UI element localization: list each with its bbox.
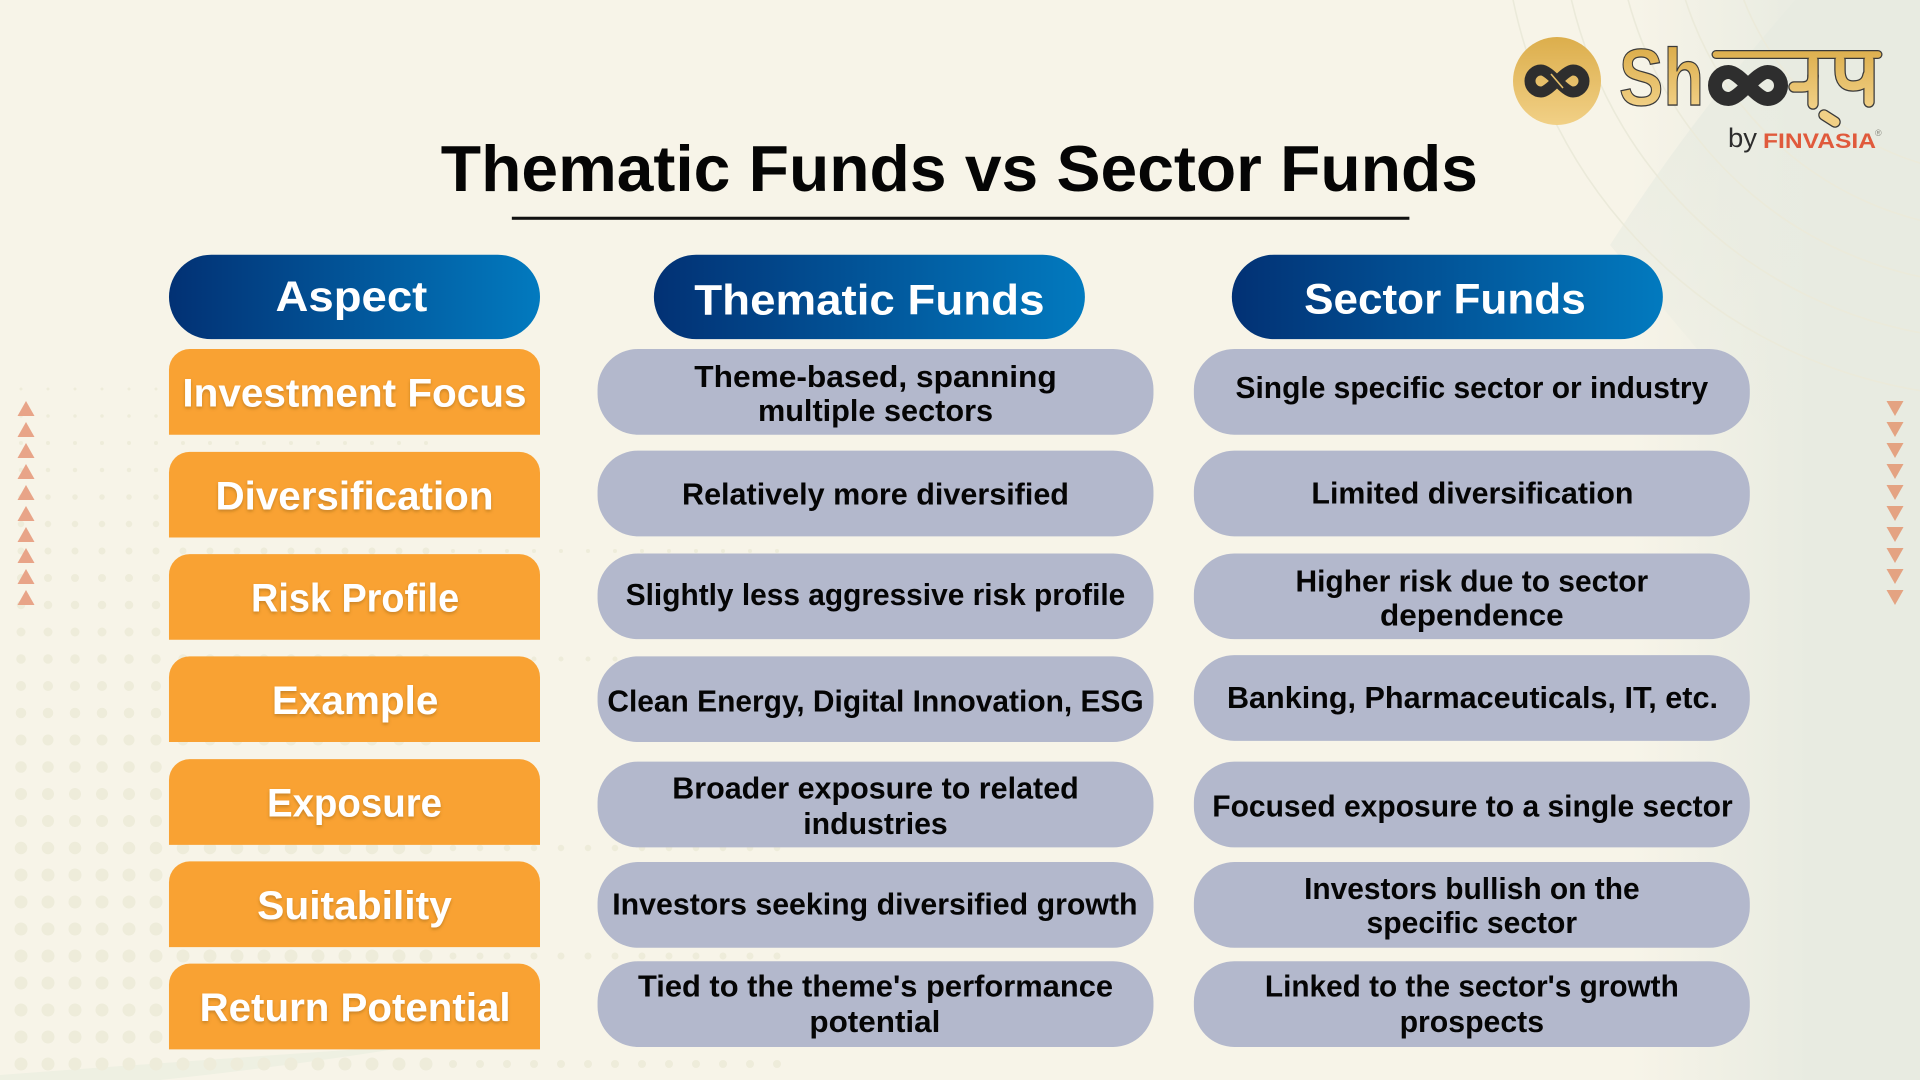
title underline — [512, 217, 1409, 220]
sector cell: exposure — [1194, 762, 1750, 847]
sector cell: suitability — [1194, 862, 1750, 948]
sector cell: return potential: Linked to the sector's growth — [1265, 970, 1679, 1004]
logo byline: FINVASIA — [1763, 129, 1876, 153]
row label: Exposure: Exposure — [267, 782, 442, 826]
header: Thematic Funds — [654, 255, 1085, 339]
thematic cell: diversification — [598, 451, 1153, 536]
header: Sector Funds: Sector Funds — [1304, 275, 1586, 323]
icon: right downward triangles — [1886, 401, 1904, 605]
logo byline: ® — [1875, 128, 1882, 138]
logo wordmark — [1619, 33, 1878, 123]
sector cell: investment focus — [1194, 349, 1750, 435]
thematic cell: return potential: Tied to the theme's performance — [638, 970, 1113, 1004]
sector cell: diversification — [1194, 451, 1750, 536]
sector cell: return potential — [1194, 961, 1750, 1047]
thematic cell: suitability: Investors seeking diversified growth — [612, 888, 1138, 922]
sector cell: return potential: prospects — [1400, 1005, 1544, 1039]
thematic cell: investment focus: Theme-based, spanning — [694, 360, 1057, 394]
header: Thematic Funds: Thematic Funds — [694, 277, 1044, 325]
sector cell: investment focus: Single specific sector or industry — [1236, 371, 1708, 405]
row label: Example: Example — [272, 679, 438, 723]
thematic cell: risk profile — [598, 553, 1153, 639]
logo byline — [1728, 123, 1882, 153]
row label: Suitability: Suitability — [257, 884, 452, 928]
sector cell: example: Banking, Pharmaceuticals, IT, etc. — [1227, 681, 1718, 715]
row label: Investment Focus: Investment Focus — [182, 372, 527, 416]
title: Thematic Funds vs Sector Funds — [441, 132, 1478, 205]
header: Sector Funds — [1232, 255, 1663, 339]
thematic cell: exposure — [598, 762, 1153, 847]
thematic cell: example: Clean Energy, Digital Innovation, ESG — [607, 684, 1144, 718]
sector cell: exposure: Focused exposure to a single sector — [1212, 790, 1733, 824]
thematic cell: risk profile: Slightly less aggressive risk profile — [626, 578, 1125, 612]
thematic cell: diversification: Relatively more diversified — [682, 477, 1069, 511]
thematic cell: example — [598, 656, 1153, 742]
header: Aspect: Aspect — [276, 273, 427, 321]
row label: Suitability — [169, 861, 540, 947]
row label: Return Potential: Return Potential — [200, 986, 511, 1030]
thematic cell: return potential — [598, 961, 1153, 1047]
row label: Risk Profile — [169, 554, 540, 640]
sector cell: suitability: Investors bullish on the — [1304, 872, 1640, 906]
thematic cell: exposure: industries — [803, 807, 948, 841]
logo byline: by — [1728, 123, 1757, 153]
sector cell: risk profile — [1194, 553, 1750, 639]
row label: Diversification — [169, 452, 540, 538]
thematic cell: return potential: potential — [809, 1005, 940, 1039]
row label: Return Potential — [169, 964, 540, 1049]
thematic cell: exposure: Broader exposure to related — [672, 771, 1079, 805]
logo wordmark: Sh — [1619, 33, 1704, 123]
sector cell: suitability: specific sector — [1367, 906, 1577, 940]
row label: Investment Focus — [169, 349, 540, 435]
row label: Diversification: Diversification — [216, 474, 493, 518]
sector cell: diversification: Limited diversification — [1311, 476, 1633, 510]
row label: Exposure — [169, 759, 540, 845]
thematic cell: investment focus: multiple sectors — [758, 394, 993, 428]
icon: gold infinity badge — [1513, 37, 1601, 125]
thematic cell: suitability — [598, 862, 1153, 948]
header: Aspect — [169, 255, 540, 339]
row label: Example — [169, 656, 540, 742]
sector cell: risk profile: Higher risk due to sector — [1296, 564, 1648, 598]
thematic cell: investment focus — [598, 349, 1153, 435]
sector cell: risk profile: dependence — [1380, 599, 1564, 633]
sector cell: example — [1194, 655, 1750, 741]
row label: Risk Profile: Risk Profile — [251, 577, 459, 621]
logo: Shoonya by Finvasia — [1513, 33, 1882, 153]
icon: left upward triangles — [18, 401, 34, 605]
